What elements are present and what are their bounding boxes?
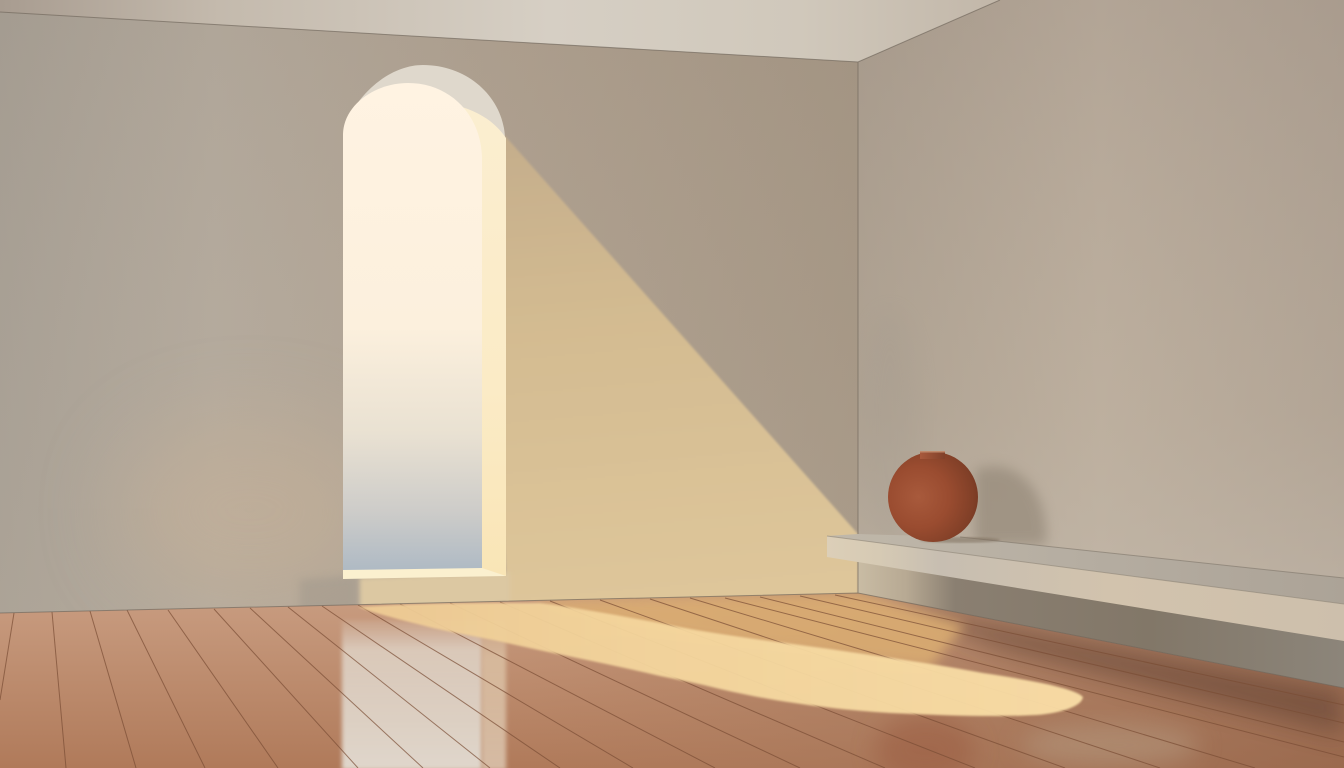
window (343, 65, 506, 579)
vase neck (920, 451, 945, 459)
light beam on wall (505, 136, 858, 601)
shelf (827, 534, 1344, 641)
shadow: vase on wall (975, 467, 1046, 545)
window opening (343, 83, 482, 570)
glow: amber floor near corner (530, 592, 965, 668)
floor (0, 590, 1344, 768)
vase body (888, 452, 978, 542)
window reveal (440, 107, 506, 576)
floorboards (0, 595, 1344, 768)
arch crescent (345, 65, 505, 140)
reflection: window on floor (342, 620, 482, 768)
shelf top (827, 534, 1344, 604)
vase (888, 451, 1000, 543)
back wall (0, 0, 858, 620)
sunlight pool on floor (358, 603, 1083, 716)
right wall (858, 0, 1344, 690)
shadow: floor along right wall (900, 604, 1344, 735)
window sill (343, 568, 506, 579)
shadow: under shelf (858, 562, 1344, 688)
ceiling (0, 0, 1000, 62)
shelf front (827, 536, 1344, 641)
